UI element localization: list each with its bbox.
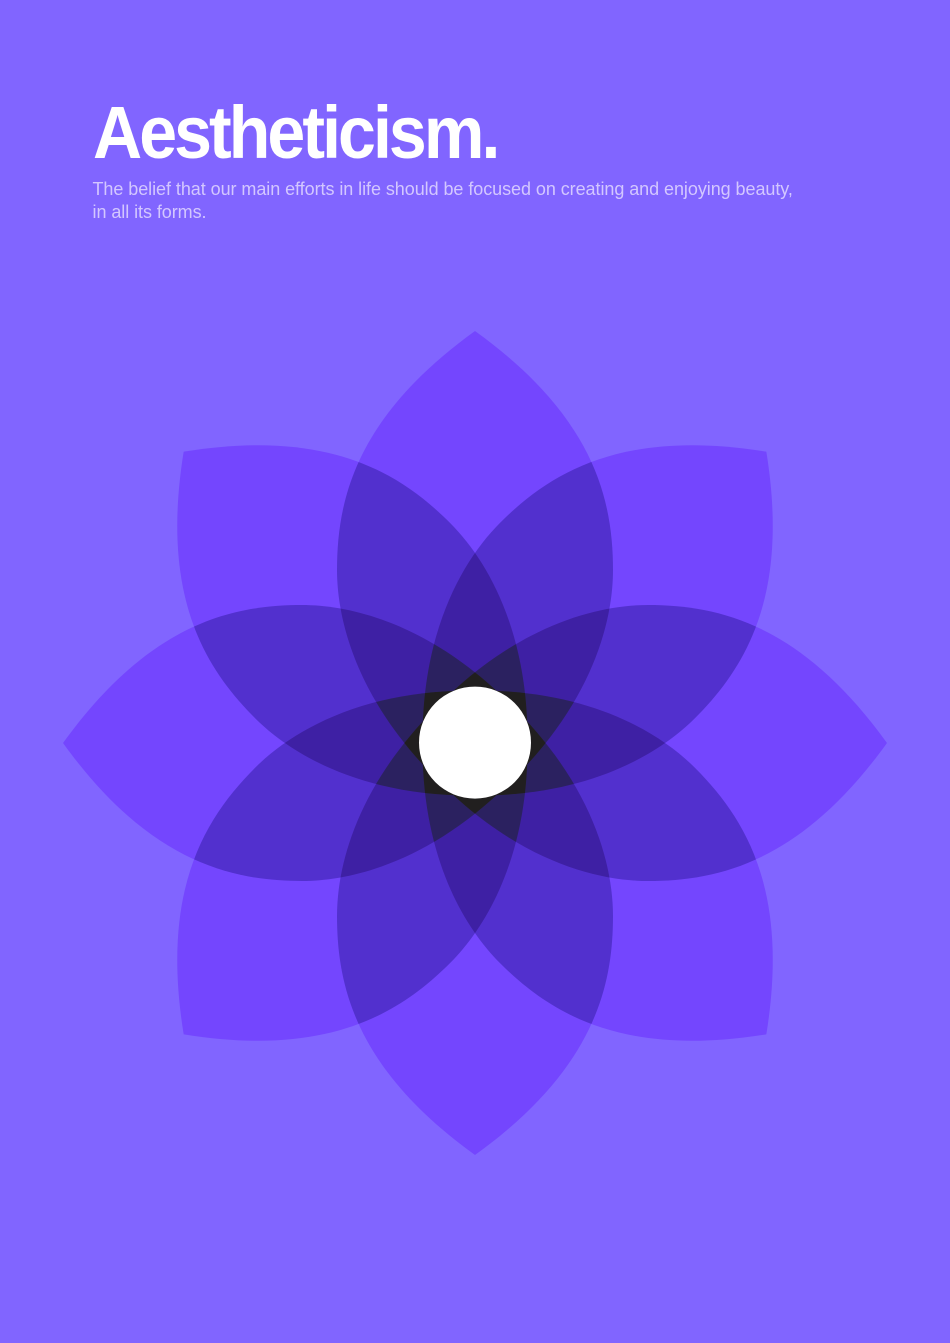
title: Aestheticism. [93,91,497,174]
petal: west [63,605,545,881]
petal: south [337,673,613,1155]
description: The belief that our main efforts in life should be focused on creating and enjoying beauty, [92,179,793,199]
petal: north [337,331,613,813]
petal: north-east [328,354,864,890]
description: in all its forms. [92,202,207,222]
white centre circle [419,687,531,799]
petal: east [405,605,887,881]
header [92,91,793,222]
petal: north-west [86,354,622,890]
petal: south-east [328,596,864,1132]
petal: south-west [86,596,622,1132]
description [92,179,793,222]
